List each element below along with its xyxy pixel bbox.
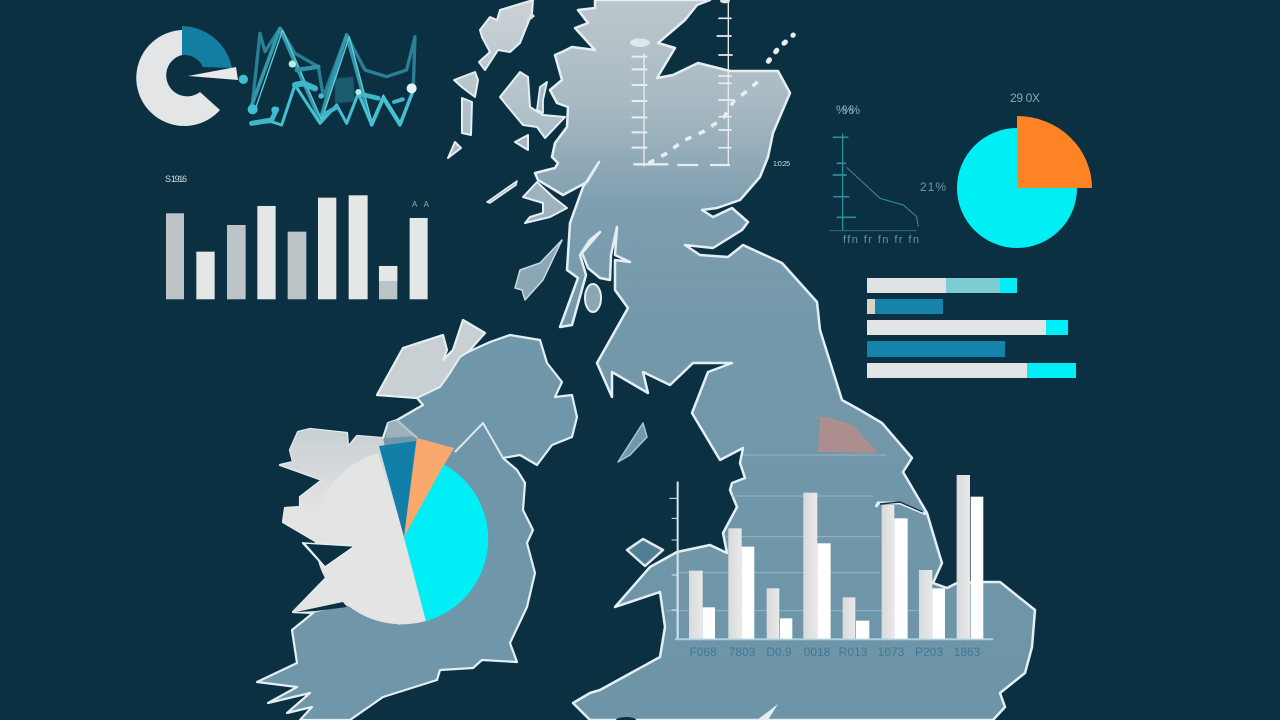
- dotted chart over Scotland: [630, 0, 793, 167]
- mid line highlight: [255, 30, 415, 122]
- Sligo patch: [386, 420, 417, 438]
- donut chart: [136, 26, 238, 126]
- year labels: R013: [839, 645, 868, 659]
- bar 4: [867, 341, 1005, 357]
- year labels: [689, 645, 981, 659]
- left axis: [642, 53, 646, 167]
- dotted tail: [768, 35, 793, 61]
- bar 5: [867, 363, 1076, 378]
- year labels: 1073: [878, 645, 905, 659]
- Britain mainland: [535, 0, 1035, 720]
- bar chart label: S 1916: [165, 174, 187, 184]
- island: Barra: [448, 142, 461, 158]
- border line west: [398, 421, 417, 438]
- dark sliver below the pie: [296, 602, 347, 612]
- Ireland outline: [257, 320, 577, 720]
- year labels: D0.9: [766, 645, 792, 659]
- bright line: [250, 85, 413, 125]
- top marker right: [720, 0, 730, 3]
- island: Isle of Man: [627, 539, 663, 566]
- top marker: [630, 38, 650, 47]
- map: Ireland: [257, 320, 577, 720]
- bar chart top left: [165, 174, 430, 299]
- dotted trend: [648, 78, 762, 163]
- left ticks: [632, 57, 647, 148]
- donut white spike: [188, 67, 238, 80]
- line markers: [239, 75, 324, 114]
- year labels: 1863: [954, 645, 981, 659]
- island: Uist: [454, 72, 478, 97]
- line chart top left: [239, 28, 417, 125]
- Wales spike: [757, 704, 778, 720]
- small value label: 1:0:25: [773, 161, 790, 168]
- bottom inlet: [616, 717, 636, 720]
- island: Benbecula: [462, 98, 472, 135]
- pale markers: [289, 60, 361, 95]
- year labels: P203: [915, 645, 943, 659]
- year labels: F068: [689, 645, 717, 659]
- island: Lewis: [479, 0, 533, 70]
- faint line: [252, 28, 415, 110]
- Galway bay cut into the pie: [304, 543, 355, 567]
- island: Skye strip: [537, 82, 547, 113]
- island: Islay: [515, 240, 562, 300]
- island: dash: [527, 15, 534, 21]
- donut blue segment: [182, 26, 232, 68]
- island: Coll: [487, 181, 517, 203]
- map: Great Britain: [448, 0, 1035, 720]
- axes: [669, 482, 993, 640]
- island: Arran: [585, 284, 601, 312]
- pie chart top right: [920, 91, 1092, 248]
- border lines: [455, 423, 503, 458]
- Humber estuary: [876, 503, 926, 514]
- right ticks: [717, 18, 735, 148]
- chart axes and curve: [829, 133, 918, 231]
- island: Irish Sea shard: [618, 423, 647, 462]
- bar 3: [867, 320, 1068, 335]
- bars: [689, 475, 983, 639]
- donut grey arc: [136, 30, 220, 126]
- orange slice: [1017, 116, 1092, 188]
- bar 1: [867, 278, 1017, 293]
- mid line: [250, 28, 413, 125]
- small line chart: [829, 103, 919, 246]
- pie slice: orange: [404, 438, 454, 537]
- island: Skye: [500, 72, 565, 138]
- bar 2: [867, 299, 943, 314]
- chart title: %%%: [836, 103, 860, 117]
- baseline: [633, 161, 730, 168]
- year labels: 0018: [804, 645, 831, 659]
- island: Mull: [523, 182, 567, 223]
- grouped bar chart over England: [667, 455, 993, 659]
- island: Rum: [515, 135, 528, 150]
- pie side label: 21%: [920, 180, 946, 194]
- pie title: 29 0X: [1010, 91, 1040, 105]
- thick line segments: [252, 67, 403, 123]
- last bar label: AA: [412, 200, 430, 209]
- bars: [166, 195, 428, 299]
- pie slice: blue: [379, 441, 416, 537]
- axis labels: ffn fr fn fr fn: [843, 234, 919, 246]
- Connacht highlight: [280, 429, 404, 625]
- year labels: 7803: [729, 645, 756, 659]
- pie chart on Ireland: [296, 438, 488, 624]
- white marker: [407, 83, 417, 93]
- red shaded region: [810, 417, 878, 453]
- Donegal highlight: [377, 320, 485, 398]
- pie slice: grey: [315, 453, 426, 624]
- right axis: [726, 0, 730, 165]
- pie slice: cyan: [404, 464, 488, 621]
- grid lines: [667, 455, 943, 611]
- dark shading under lines: [335, 77, 355, 103]
- horizontal bars right: [867, 278, 1076, 378]
- cyan disc: [957, 128, 1077, 248]
